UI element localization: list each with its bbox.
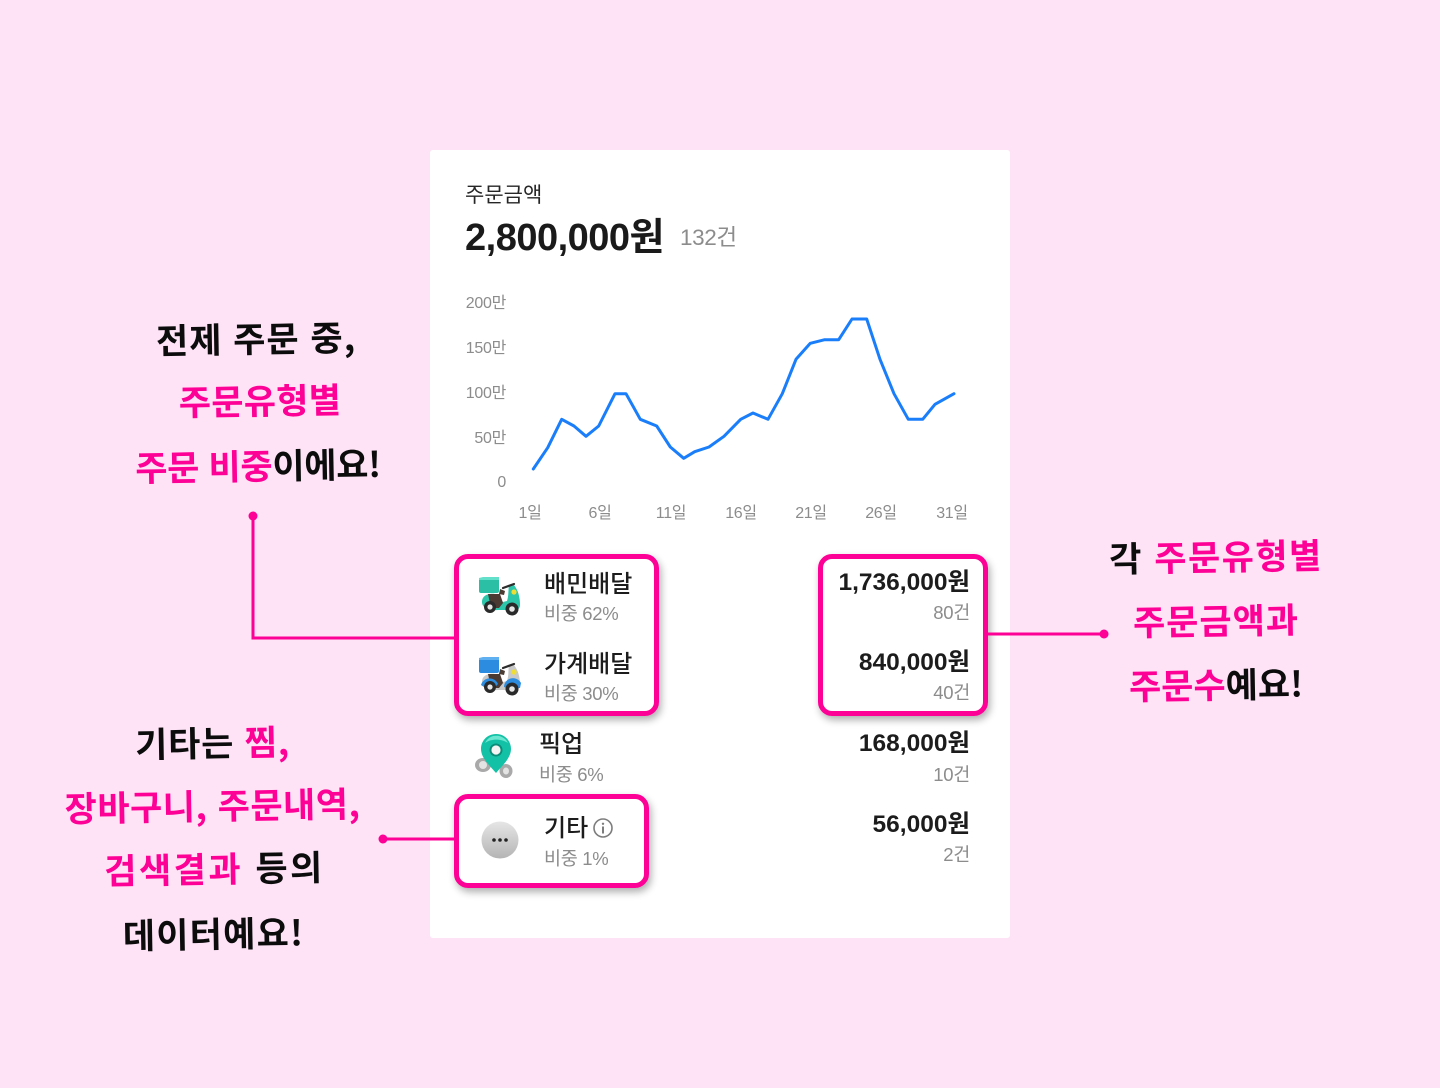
highlight box: delivery types — [454, 554, 659, 716]
x axis labels: 26일 — [865, 504, 897, 522]
row share: store delivery: 비중 30% — [544, 683, 618, 704]
total amount: 2,800,000원 — [465, 217, 664, 259]
icon: blue delivery scooter — [479, 657, 521, 696]
callout: amount and count note — [1109, 528, 1323, 711]
callout line 3: 검색결과 등의 — [104, 840, 325, 895]
row label: pickup: 픽업 — [539, 731, 583, 758]
callout line 2: 주문금액과 — [1133, 593, 1299, 646]
heading: order amount label: 주문금액 — [465, 184, 542, 207]
total order count: 132건 — [680, 225, 737, 250]
arrow: connector from share note to delivery box — [248, 512, 454, 640]
row label: other: 기타 — [544, 815, 588, 842]
row label: baemin delivery: 배민배달 — [544, 571, 632, 598]
icon: teal delivery scooter — [479, 577, 520, 616]
callout: order type share note — [135, 310, 381, 492]
arrow: connector from amounts box to right note — [988, 630, 1108, 638]
x axis labels: 6일 — [588, 504, 612, 522]
icon: pickup map pin — [475, 734, 512, 778]
amount: pickup: 168,000원 — [859, 730, 970, 757]
callout: other category note — [64, 715, 361, 960]
callout line 3: 주문 비중이에요! — [135, 437, 381, 492]
y axis labels: 50만 — [474, 429, 507, 447]
icon: more options button — [482, 822, 518, 858]
row share: other: 비중 1% — [544, 848, 608, 869]
row label: store delivery: 가계배달 — [544, 651, 632, 678]
row share: baemin delivery: 비중 62% — [544, 603, 618, 624]
panel: order amount card — [430, 150, 1010, 938]
callout line 2: 장바구니, 주문내역, — [64, 776, 361, 833]
callout line 4: 데이터예요! — [122, 905, 305, 960]
x axis labels: 11일 — [656, 504, 686, 522]
x axis labels: 1일 — [518, 504, 542, 522]
amount: other: 56,000원 — [873, 811, 970, 838]
count: store delivery: 40건 — [933, 682, 970, 703]
count: pickup: 10건 — [933, 764, 970, 785]
callout line 3: 주문수예요! — [1129, 656, 1303, 711]
x axis labels: 16일 — [725, 504, 757, 522]
data line — [533, 319, 954, 469]
y axis labels: 200만 — [466, 294, 507, 312]
highlight box: other type — [454, 794, 649, 888]
y axis labels: 0 — [497, 474, 506, 491]
callout line 1: 전제 주문 중, — [156, 310, 356, 365]
y axis labels — [466, 294, 507, 491]
arrow: connector from other note to other box — [378, 834, 454, 844]
row share: pickup: 비중 6% — [539, 764, 603, 785]
line chart: daily order amount — [466, 294, 968, 522]
y axis labels: 100만 — [466, 384, 507, 402]
amount: baemin delivery: 1,736,000원 — [838, 569, 970, 596]
callout line 1: 각 주문유형별 — [1109, 528, 1323, 583]
callout line 1: 기타는 찜, — [135, 715, 290, 768]
count: other: 2건 — [943, 844, 970, 865]
amount: store delivery: 840,000원 — [859, 649, 970, 676]
y axis labels: 150만 — [466, 339, 507, 357]
highlight box: amounts and counts — [818, 554, 988, 716]
count: baemin delivery: 80건 — [933, 602, 970, 623]
x axis labels — [518, 504, 968, 522]
x axis labels: 21일 — [795, 504, 827, 522]
callout line 2: 주문유형별 — [178, 373, 342, 426]
icon: info — [593, 818, 613, 838]
x axis labels: 31일 — [936, 504, 968, 522]
